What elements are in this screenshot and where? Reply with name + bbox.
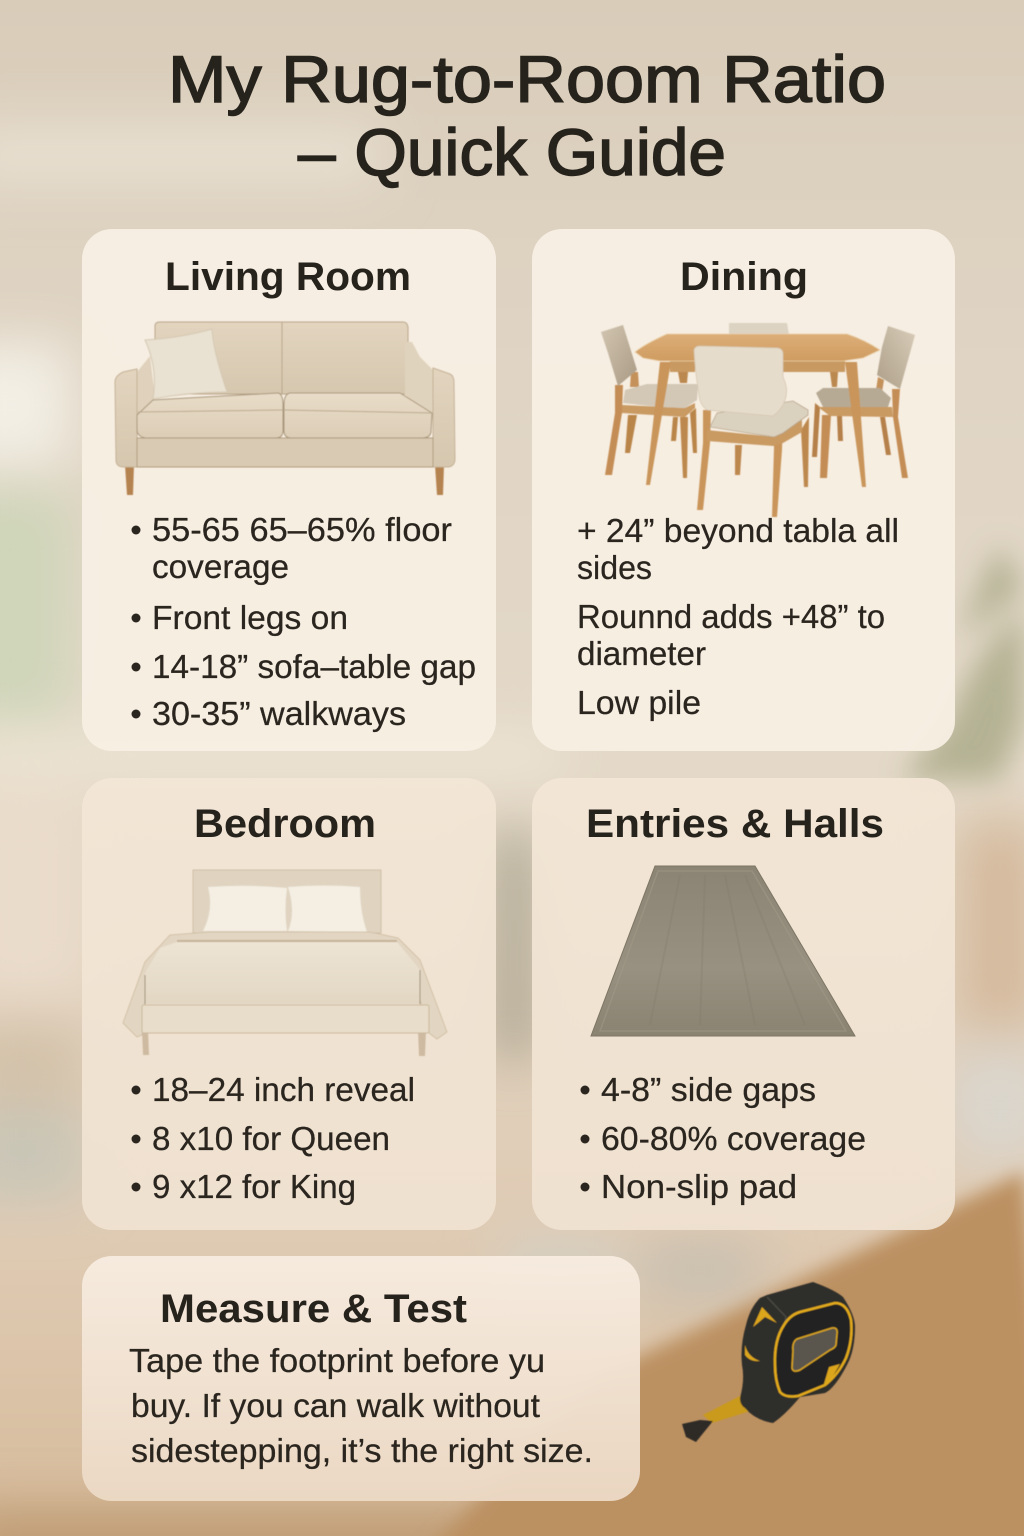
icon: sofa bbox=[115, 322, 455, 495]
right chair bbox=[812, 326, 915, 478]
text block: measure advice: buy. If you can walk without bbox=[131, 1387, 540, 1424]
text block: measure advice bbox=[129, 1342, 593, 1469]
list: living room tips bbox=[132, 511, 476, 732]
list: entries tips: Non-slip pad bbox=[601, 1168, 797, 1205]
table legs bbox=[646, 362, 866, 487]
panel: bedroom bbox=[82, 778, 496, 1230]
title: My Rug-to-Room Ratio bbox=[168, 42, 886, 116]
panel: entries and halls bbox=[532, 778, 955, 1230]
heading: entries and halls: Entries & Halls bbox=[586, 802, 884, 846]
list: dining tips: sides bbox=[577, 549, 652, 586]
list: living room tips: Front legs on bbox=[152, 599, 348, 636]
panel: measure and test bbox=[82, 1256, 640, 1501]
list: bedroom tips: 8 x10 for Queen bbox=[152, 1120, 390, 1157]
list: dining tips bbox=[577, 512, 899, 721]
text block: measure advice: Tape the footprint before yu bbox=[129, 1342, 545, 1379]
list: dining tips: diameter bbox=[577, 635, 706, 672]
text block: measure advice: sidestepping, it’s the right size. bbox=[131, 1432, 593, 1469]
list: living room tips: coverage bbox=[152, 548, 289, 585]
list: entries tips: 4-8” side gaps bbox=[601, 1071, 816, 1108]
panel: dining bbox=[532, 229, 955, 751]
list: living room tips: 14-18” sofa–table gap bbox=[152, 648, 476, 685]
icon: bed bbox=[123, 870, 447, 1056]
list: entries tips: 60-80% coverage bbox=[601, 1120, 866, 1157]
panel: living room bbox=[82, 229, 496, 751]
title: – Quick Guide bbox=[298, 115, 726, 189]
heading: dining: Dining bbox=[680, 255, 808, 299]
title bbox=[168, 42, 886, 189]
list: entries tips bbox=[580, 1071, 866, 1205]
list: dining tips: Low pile bbox=[577, 684, 701, 721]
icon: tape measure bbox=[682, 1282, 855, 1442]
list: dining tips: Rounnd adds +48” to bbox=[577, 598, 885, 635]
list: living room tips: 30-35” walkways bbox=[152, 695, 406, 732]
icon: dining set bbox=[601, 323, 915, 517]
list: living room tips: 55-65 65–65% floor bbox=[152, 511, 452, 548]
heading: bedroom: Bedroom bbox=[194, 802, 376, 846]
left chair bbox=[601, 325, 698, 478]
list: bedroom tips: 9 x12 for King bbox=[152, 1168, 356, 1205]
list: bedroom tips bbox=[132, 1071, 415, 1205]
heading: living room: Living Room bbox=[165, 255, 411, 299]
heading: measure and test: Measure & Test bbox=[160, 1287, 467, 1331]
list: dining tips: + 24” beyond tabla all bbox=[577, 512, 899, 549]
list: bedroom tips: 18–24 inch reveal bbox=[152, 1071, 415, 1108]
front chair bbox=[694, 346, 809, 517]
icon: runner rug bbox=[591, 866, 855, 1036]
